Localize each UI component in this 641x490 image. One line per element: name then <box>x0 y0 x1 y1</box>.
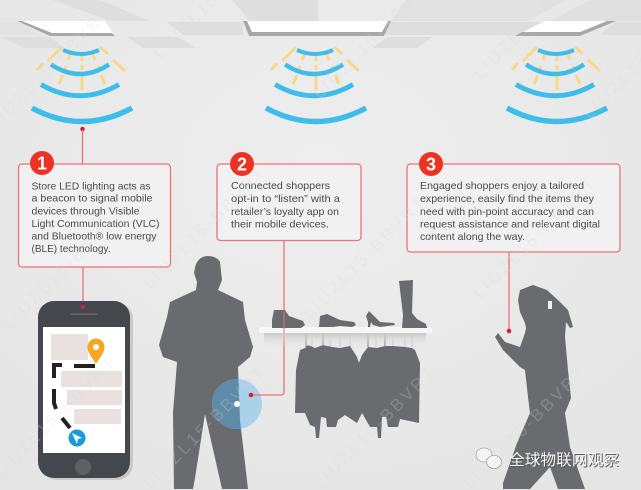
watermark: LIUZL15-BBVRT <box>309 362 440 490</box>
step 2 text <box>231 181 340 230</box>
ceiling light 1 <box>17 21 115 36</box>
phone body <box>38 301 130 478</box>
map pin <box>88 338 104 364</box>
loafer <box>319 314 356 327</box>
signal arcs 2 <box>266 47 366 122</box>
shelf <box>259 327 432 347</box>
step 2 text: opt-in to “listen” with a <box>231 194 340 205</box>
badge 1: 1 <box>37 154 47 174</box>
phone speaker <box>70 314 98 315</box>
phone screen <box>43 327 125 453</box>
step 3 text: experience, easily find the items they <box>420 194 595 205</box>
route <box>54 365 95 428</box>
watermark: LIUZL15-BBVRT <box>139 362 270 490</box>
watermark: LIUZL15-BBVRT <box>459 362 590 490</box>
signal arcs 1 <box>32 47 132 122</box>
step 2 text: retailer’s loyalty app on <box>231 207 339 218</box>
connector: box 2 to beacon <box>249 240 284 397</box>
watermark: LIUZL15-BBVRT <box>469 172 600 303</box>
step 3 text: content along the way. <box>420 232 525 243</box>
connector over shelf <box>283 311 285 333</box>
phone home button <box>75 459 91 475</box>
step 1 text: Light Communication (VLC) <box>32 219 160 230</box>
connector: light to box 1 <box>80 127 85 165</box>
connector: box 1 to phone <box>82 267 84 305</box>
hangers <box>306 333 385 347</box>
watermark: LIUZL15-BBVRT <box>299 192 430 323</box>
step 1 text <box>32 182 160 255</box>
step 1 text: Store LED lighting acts as <box>32 182 150 192</box>
panel: step 2 <box>217 152 361 240</box>
phone shadow <box>41 303 133 480</box>
shopper silhouette <box>159 256 253 489</box>
location arrow <box>68 430 86 446</box>
step 3 text: Engaged shoppers enjoy a tailored <box>420 181 584 192</box>
step 2 text: their mobile devices. <box>231 220 329 230</box>
shopper woman silhouette <box>495 285 585 489</box>
wechat account name: 全球物联网观察 <box>509 451 619 469</box>
map blocks <box>51 334 122 424</box>
step 3 text: request assistance and relevant digital <box>420 220 600 230</box>
connector: box 3 to woman <box>507 252 511 333</box>
garments <box>295 345 420 438</box>
step 1 text: a beacon to signal mobile <box>32 194 153 204</box>
clothing rack <box>295 333 420 438</box>
tall boot <box>399 280 427 328</box>
step 1 text: devices through Visible <box>32 206 140 218</box>
earbud highlight <box>548 301 552 309</box>
ceiling light 2 <box>243 21 391 36</box>
shoes <box>272 280 427 328</box>
wechat account name: 全球物联网观察 <box>510 452 620 470</box>
phone <box>38 301 133 480</box>
step 1 text: and Bluetooth® low energy <box>32 232 157 242</box>
badge 2: 2 <box>237 154 247 174</box>
ankle boot <box>272 310 305 328</box>
ceiling light 3 <box>515 21 616 36</box>
step 2 text: Connected shoppers <box>231 181 330 192</box>
step 3 text <box>420 181 600 243</box>
panel: step 3 <box>407 152 620 252</box>
signal arcs 3 <box>507 47 607 122</box>
badge 1 <box>30 151 54 175</box>
watermark: LIUZL15-BBVRT <box>139 162 270 293</box>
watermark: LIUZL15-BBVRT <box>0 202 130 333</box>
high heel <box>366 311 395 327</box>
connector dot <box>81 305 85 309</box>
badge 2 <box>230 152 254 176</box>
badge 3: 3 <box>426 154 436 174</box>
beacon circle <box>212 379 262 429</box>
wechat logo <box>476 448 502 468</box>
panel: step 1 <box>18 151 170 267</box>
ceiling shading <box>0 0 641 48</box>
step 3 text: need with pin-point accuracy and can <box>420 207 594 218</box>
step 1 text: (BLE) technology. <box>32 244 110 255</box>
badge 3 <box>419 152 443 176</box>
